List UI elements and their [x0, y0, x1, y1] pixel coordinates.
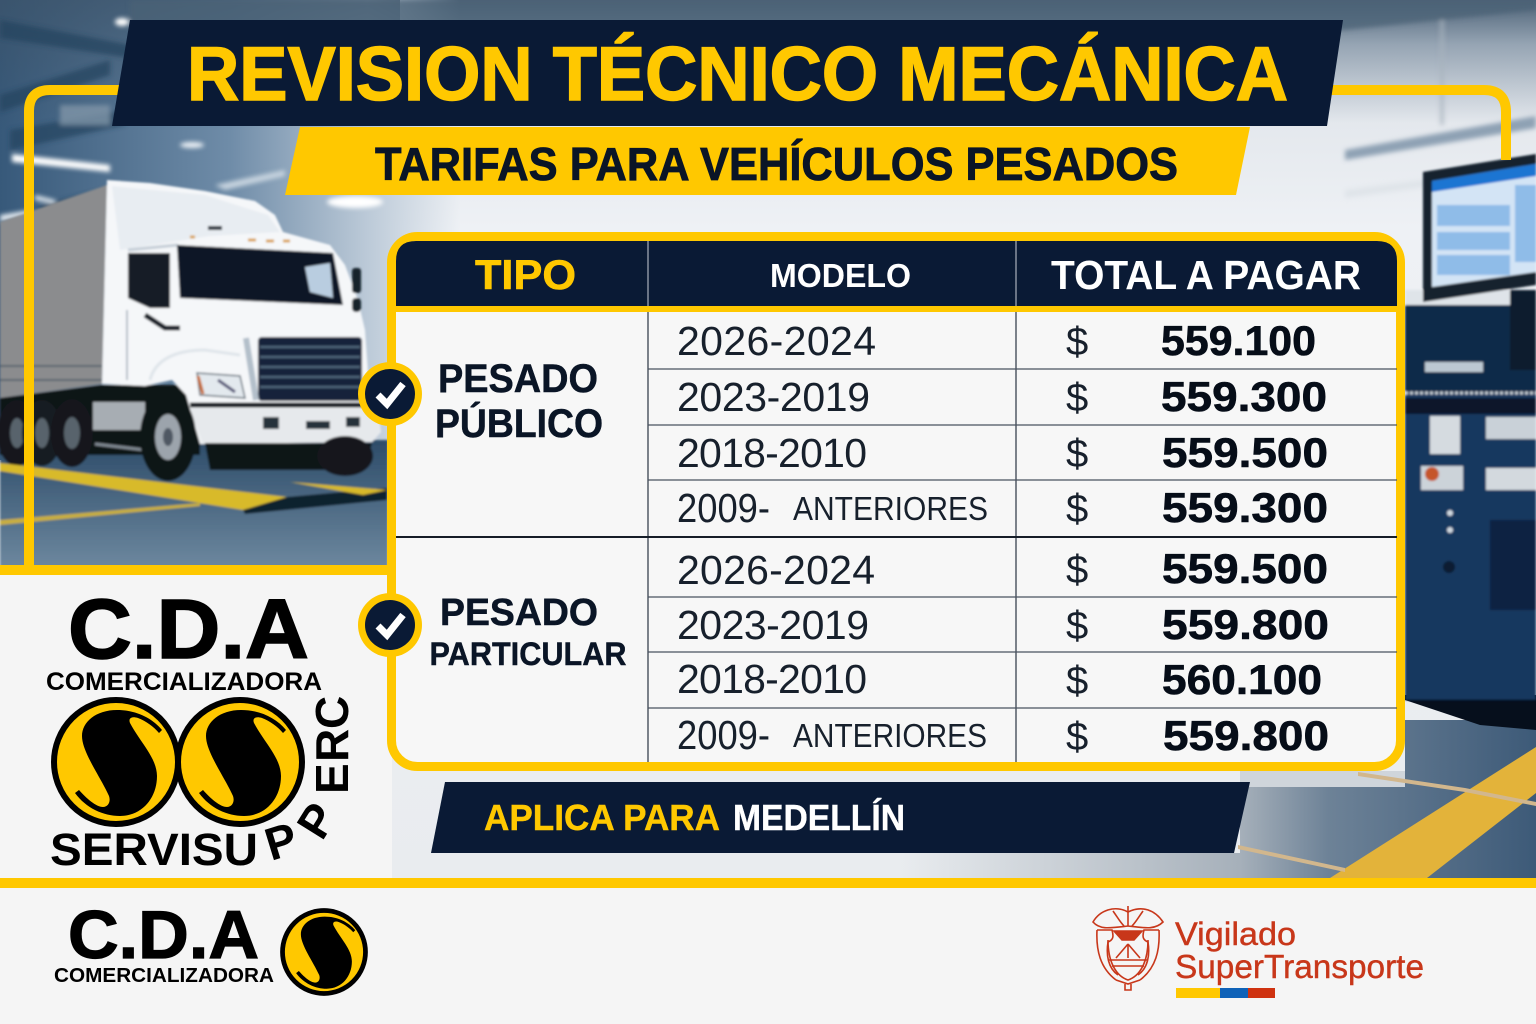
logo: footer C.D.A: C.D.A [68, 897, 259, 973]
currency signs: $ [1066, 432, 1088, 476]
currency signs [1066, 320, 1088, 759]
type label: pesado particular: PARTICULAR [430, 636, 626, 672]
model years: ANTERIORES [793, 490, 988, 527]
icon: S emblem left [54, 700, 178, 824]
side window and mirror [128, 253, 170, 308]
marker lights [190, 237, 290, 241]
table header: TOTAL A PAGAR [1051, 252, 1361, 298]
prices: 559.800 [1162, 601, 1329, 648]
model years: 2023-2019 [677, 602, 869, 648]
subtitle banner: TARIFAS PARA VEHÍCULOS PESADOS [375, 138, 1178, 190]
prices [1161, 317, 1329, 759]
currency signs: $ [1066, 320, 1088, 364]
yellow frame around the truck [29, 90, 1506, 570]
subtitle banner [285, 127, 1250, 195]
prices: 559.500 [1162, 545, 1328, 592]
currency signs: $ [1066, 715, 1088, 759]
logo: C.D.A Servisupperc: R [306, 729, 358, 762]
model years: 2009- [677, 712, 770, 758]
radiator grille [258, 337, 362, 401]
logo: C.D.A Servisupperc: C [306, 696, 358, 729]
logo: footer C.D.A: COMERCIALIZADORA [54, 965, 274, 987]
table grid lines [396, 312, 1397, 762]
cargo box [0, 185, 107, 398]
table header: MODELO [770, 257, 911, 294]
bumper [190, 408, 381, 443]
table header: TIPO [475, 251, 576, 298]
currency signs: $ [1066, 487, 1088, 531]
icon: check badge particular [358, 593, 422, 657]
floor bottom right [900, 853, 1240, 880]
currency signs: $ [1066, 604, 1088, 648]
title banner: REVISION TÉCNICO MECÁNICA [187, 32, 1288, 117]
currency signs: $ [1066, 376, 1088, 420]
model years [677, 318, 988, 758]
front wheels [205, 443, 372, 470]
icon: check badge public [358, 362, 422, 426]
rear wheels [0, 400, 37, 466]
tariff table [392, 236, 1400, 766]
icon: S emblem right [178, 700, 302, 824]
model years: 2018-2010 [677, 656, 867, 702]
logo: C.D.A Servisupperc [46, 582, 358, 875]
coverage banner: MEDELLÍN [733, 797, 905, 838]
logo: C.D.A Servisupperc: COMERCIALIZADORA [46, 668, 322, 696]
prices: 559.800 [1163, 712, 1329, 759]
model years: ANTERIORES [793, 717, 987, 754]
windshield [177, 245, 343, 305]
photo: diagnostic machine and monitor [1405, 154, 1536, 700]
model years: 2018-2010 [677, 430, 867, 476]
prices: 559.500 [1162, 429, 1328, 476]
logo: Vigilado SuperTransporte [1093, 906, 1424, 998]
coverage banner: APLICA PARA [484, 797, 720, 838]
photo: white truck on inspection lane [0, 180, 388, 568]
type label: pesado publico: PÚBLICO [435, 400, 603, 446]
logo: C.D.A Servisupperc: C.D.A [68, 582, 309, 676]
type label: pesado particular: PESADO [440, 592, 598, 634]
chassis [0, 385, 200, 455]
currency signs: $ [1066, 659, 1088, 703]
top strip streaks [130, 0, 1536, 30]
type label: pesado publico [435, 357, 603, 446]
model years: 2009- [677, 485, 770, 531]
cab body [102, 180, 381, 444]
model years: 2023-2019 [677, 374, 870, 420]
type label: pesado particular [430, 592, 626, 672]
prices: 559.300 [1161, 373, 1327, 420]
logo: C.D.A Servisupperc: SERVISU [50, 824, 258, 875]
prices: 559.300 [1162, 484, 1328, 531]
prices: 560.100 [1162, 656, 1322, 703]
coverage banner [431, 782, 1250, 853]
logo: C.D.A Servisupperc: E [306, 763, 358, 794]
type label: pesado publico: PESADO [438, 357, 598, 401]
model years: 2026-2024 [677, 318, 876, 364]
icon: coat of arms [1093, 906, 1163, 990]
headlight [197, 373, 245, 398]
logo: Vigilado SuperTransporte: SuperTransporte [1175, 948, 1424, 985]
model years: 2026-2024 [677, 547, 875, 593]
floor stripes [0, 463, 287, 510]
table header [396, 241, 1397, 312]
logo: C.D.A Servisupperc: P [259, 812, 303, 871]
footer strip [0, 878, 1536, 1024]
icon: S emblem footer [283, 911, 365, 993]
logo: C.D.A Servisupperc: P [286, 794, 347, 847]
prices: 559.100 [1161, 317, 1316, 364]
colour bar [1176, 988, 1275, 998]
logo: footer C.D.A [54, 897, 365, 993]
logo: Vigilado SuperTransporte: Vigilado [1175, 916, 1296, 952]
white logo panel [0, 565, 392, 880]
currency signs: $ [1066, 548, 1088, 592]
